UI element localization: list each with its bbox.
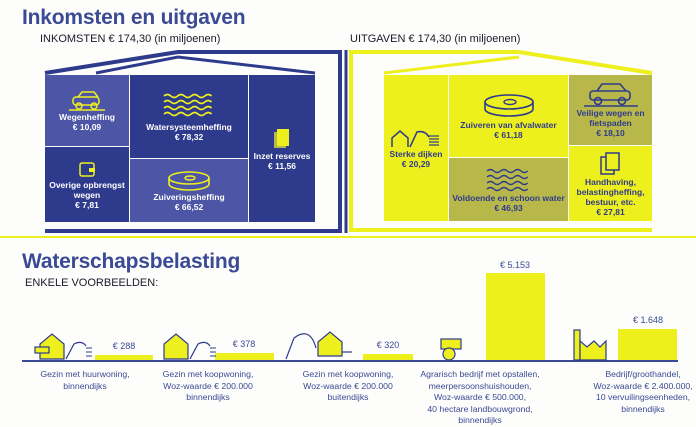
caption: agrarisch bedrijf: Agrarisch bedrijf met opstallen, xyxy=(420,369,540,379)
bar chart: examples: € 320 xyxy=(377,340,399,350)
caption: bedrijf xyxy=(593,369,693,414)
box: inzet reserves: € 11,56 xyxy=(268,160,296,170)
caption: koopwoning buitendijks xyxy=(303,369,393,402)
subtitle: uitgaven: UITGAVEN € 174,30 (in miljoenen) xyxy=(350,33,520,45)
bar: 5153 xyxy=(486,273,545,360)
caption: agrarisch bedrijf xyxy=(420,369,540,425)
caption: agrarisch bedrijf: binnendijks xyxy=(458,415,502,425)
panel: uitgaven xyxy=(384,75,652,221)
caption: koopwoning binnendijks xyxy=(163,369,253,402)
caption: koopwoning buitendijks: buitendijks xyxy=(327,392,369,402)
box: zuiveringsheffing: Zuiveringsheffing xyxy=(153,192,225,202)
box: handhaving: Handhaving, xyxy=(585,176,636,186)
bar chart: examples: € 5.153 xyxy=(500,260,530,270)
box: veilige wegen xyxy=(569,75,652,145)
box: veilige wegen: € 18,10 xyxy=(596,128,625,138)
box: zuiveren van afvalwater: € 61,18 xyxy=(494,130,523,140)
subtitle: inkomsten: INKOMSTEN € 174,30 (in miljoenen) xyxy=(40,33,220,45)
caption: koopwoning binnendijks: binnendijks xyxy=(186,392,230,402)
bar chart: examples: € 378 xyxy=(233,339,255,349)
title: waterschapsbelasting: Waterschapsbelasting xyxy=(22,250,240,273)
box: handhaving: belastingheffing, xyxy=(576,186,644,196)
box: watersysteemheffing: € 78,32 xyxy=(175,132,203,142)
caption: bedrijf: Bedrijf/groothandel, xyxy=(605,369,681,379)
box: watersysteemheffing: Watersysteemheffing xyxy=(146,122,232,132)
box: overige opbrengst: wegen xyxy=(74,190,100,200)
caption: agrarisch bedrijf: meerpersoonshuishouden, xyxy=(429,380,531,390)
box: overige opbrengst: € 7,81 xyxy=(75,200,99,210)
box: veilige wegen: Veilige wegen en xyxy=(576,108,645,118)
bar chart: examples: € 288 xyxy=(113,341,135,351)
box: voldoende en schoon water: € 46,93 xyxy=(494,202,523,212)
box: wegenheffing: Wegenheffing xyxy=(59,112,115,122)
bar: 320 xyxy=(363,354,413,360)
panel: inkomsten xyxy=(45,75,315,222)
box: sterke dijken xyxy=(384,75,448,221)
caption: koopwoning buitendijks: Gezin met koopwoning, xyxy=(303,369,393,379)
subtitle: enkele voorbeelden: ENKELE VOORBEELDEN: xyxy=(25,277,158,289)
box: overige opbrengst: Overige opbrengst xyxy=(49,180,125,190)
box: zuiveren van afvalwater: Zuiveren van afvalwater xyxy=(460,120,557,130)
box: overige opbrengst xyxy=(45,147,129,222)
bar: 1648 xyxy=(618,329,677,360)
box: handhaving: bestuur, etc. xyxy=(585,196,636,206)
caption: huurwoning xyxy=(40,369,130,390)
box: zuiveringsheffing: € 66,52 xyxy=(175,202,203,212)
box: zuiveren van afvalwater xyxy=(449,75,568,157)
bar: 378 xyxy=(215,353,274,360)
box: sterke dijken: € 20,29 xyxy=(402,159,430,169)
caption: koopwoning binnendijks: Woz-waarde € 200.000 xyxy=(163,380,253,390)
box: handhaving xyxy=(569,146,652,221)
box: veilige wegen: fietspaden xyxy=(589,118,632,128)
caption: huurwoning: binnendijks xyxy=(63,380,107,390)
box: watersysteemheffing xyxy=(130,75,248,158)
bar: 288 xyxy=(95,355,153,360)
caption: agrarisch bedrijf: 40 hectare landbouwgrond, xyxy=(427,404,533,414)
caption: bedrijf: 10 vervuilingseenheden, xyxy=(596,392,690,402)
bar chart: examples xyxy=(95,260,677,360)
box: inzet reserves: Inzet reserves xyxy=(254,150,310,160)
box: wegenheffing xyxy=(45,75,129,146)
box: wegenheffing: € 10,09 xyxy=(73,122,101,132)
box: handhaving: € 27,81 xyxy=(596,206,625,216)
box: zuiveringsheffing xyxy=(130,159,248,222)
caption: bedrijf: Woz-waarde € 2.400.000, xyxy=(593,380,693,390)
caption: agrarisch bedrijf: Woz-waarde € 500.000, xyxy=(434,392,526,402)
caption: huurwoning: Gezin met huurwoning, xyxy=(40,369,130,379)
caption: bedrijf: binnendijks xyxy=(621,404,665,414)
bar chart: examples: € 1.648 xyxy=(633,315,663,325)
caption: koopwoning binnendijks: Gezin met koopwoning, xyxy=(163,369,253,379)
box: sterke dijken: Sterke dijken xyxy=(390,149,442,159)
title: inkomsten en uitgaven: Inkomsten en uitgaven xyxy=(22,6,245,29)
box: voldoende en schoon water xyxy=(449,158,568,221)
box: inzet reserves xyxy=(249,75,315,222)
caption: koopwoning buitendijks: Woz-waarde € 200.000 xyxy=(303,380,393,390)
box: voldoende en schoon water: Voldoende en schoon water xyxy=(452,192,565,202)
